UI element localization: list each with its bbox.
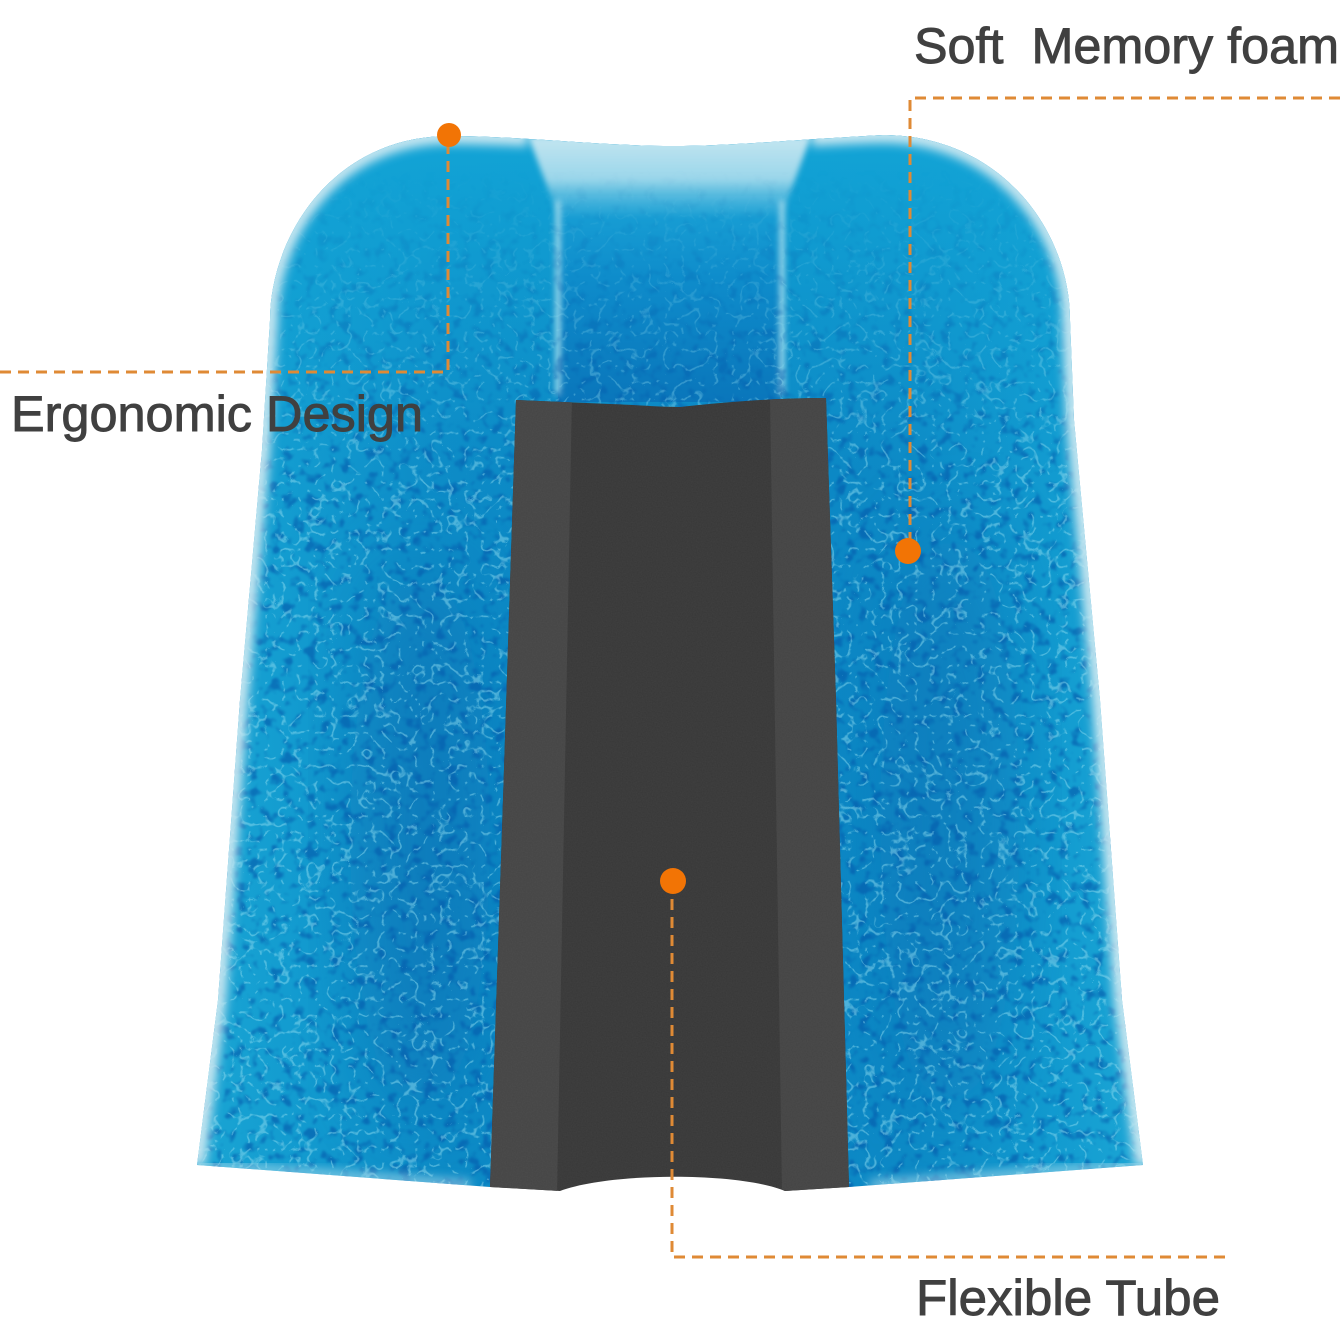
foam: channel side lines: [558, 200, 782, 395]
foam: bright lobes at top: [266, 135, 1073, 388]
callout: Ergonomic Design: Ergonomic Design: [11, 386, 423, 442]
foam: top channel: [558, 258, 782, 402]
foam earplug body: [190, 130, 1150, 1195]
foam: pale rim: [197, 135, 1143, 1165]
foam: pale ridge above channel: [528, 136, 811, 215]
callout: Soft Memory foam: [895, 18, 1340, 564]
foam: pale bottom-left and bottom-right: [197, 1165, 1143, 1185]
flexible tube: [485, 395, 855, 1195]
callout: Ergonomic Design: [0, 123, 461, 442]
foam: darker central mass: [350, 560, 490, 1120]
callout: Flexible Tube: Flexible Tube: [916, 1270, 1220, 1326]
callout: Flexible Tube: [660, 868, 1225, 1326]
callout: Soft Memory foam: Soft Memory foam: [914, 18, 1339, 74]
foam: pore texture: [198, 216, 1142, 1187]
